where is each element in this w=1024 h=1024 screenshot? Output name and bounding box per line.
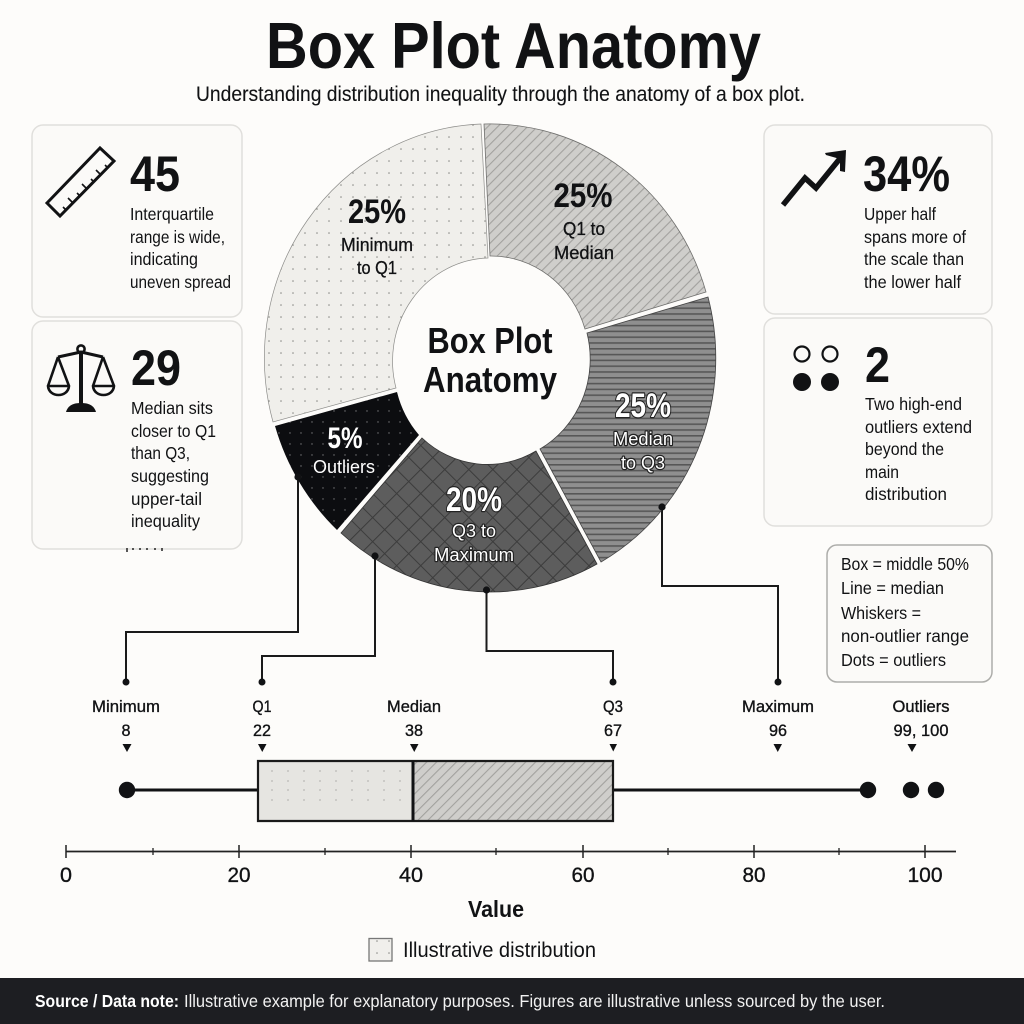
donut centre title: Anatomy [423, 359, 557, 400]
maximum dot [860, 782, 876, 798]
box plot value labels: 8 [122, 721, 130, 740]
panel: outliers card [764, 318, 992, 526]
callout: box plot key: Whiskers = [841, 603, 921, 623]
icon: four dots [793, 346, 839, 391]
text: interquartile description: Interquartile [130, 204, 214, 224]
box plot value labels: Outliers [892, 697, 950, 716]
stat: 45: 45 [130, 146, 180, 202]
label: Q1 to median: Median [554, 242, 614, 263]
text: median description: inequality [131, 511, 200, 531]
icon: rising arrow [783, 150, 846, 205]
label: minimum to Q1 [341, 193, 413, 278]
text: upper half description: Upper half [864, 204, 936, 224]
panel: upper half card [764, 125, 992, 314]
text: upper half description: the lower half [864, 272, 961, 292]
label: minimum to Q1: Minimum [341, 234, 413, 255]
median line [412, 761, 414, 821]
footer bar [0, 978, 1024, 1024]
box plot value labels: Minimum [92, 697, 160, 716]
minimum dot [119, 782, 135, 798]
callout: box plot key: non-outlier range [841, 626, 969, 646]
text: upper half description [864, 204, 966, 292]
donut centre title [423, 320, 557, 400]
connector end dots [122, 678, 782, 686]
text: outliers description: main [865, 462, 899, 482]
box plot value labels: 22 [253, 721, 271, 740]
text: outliers description [865, 394, 972, 504]
text: median description: upper-tail [131, 489, 202, 509]
text: interquartile description: indicating [130, 249, 198, 269]
box plot value labels: Q3 [603, 697, 623, 716]
text: median description: than Q3, [131, 443, 190, 463]
box plot value labels [92, 697, 950, 752]
segment: minimum to Q1 [264, 124, 488, 422]
value axis: 40 [399, 863, 423, 887]
box: Q1 to median [258, 761, 413, 821]
text: median description: Median sits [131, 398, 213, 418]
text: outliers description: Two high-end [865, 394, 962, 414]
icon: ruler [47, 148, 114, 216]
box plot value labels: Median [387, 697, 441, 716]
value axis: 20 [228, 863, 251, 887]
segment: outliers [275, 392, 419, 530]
stray marks below median card [127, 548, 162, 552]
box plot value labels: 96 [769, 721, 787, 740]
label: Q1 to median: 25% [554, 177, 612, 215]
text: median description [131, 398, 216, 531]
connector anchor dots on donut [294, 473, 666, 594]
box plot value labels: 38 [405, 721, 423, 740]
text: interquartile description [130, 204, 231, 292]
donut chart [264, 124, 716, 594]
box: median to Q3 [413, 761, 613, 821]
segment: Q1 to median [484, 124, 706, 329]
text: interquartile description: uneven spread [130, 272, 231, 292]
label: outliers: 5% [328, 422, 362, 455]
label: outliers [313, 422, 375, 477]
box dot texture [271, 770, 401, 801]
label: Q3 to maximum: Maximum [434, 544, 514, 565]
text: upper half description: the scale than [864, 249, 964, 269]
subtitle: Understanding distribution inequality through the anatomy of a box plot. [196, 83, 805, 106]
callout: box plot key: Line = median [841, 578, 944, 598]
panel: interquartile range card [32, 125, 242, 317]
label: minimum to Q1: 25% [348, 193, 406, 231]
title: Box Plot Anatomy [266, 9, 761, 82]
box plot value labels: Maximum [742, 697, 814, 716]
text: outliers description: outliers extend [865, 417, 972, 437]
value axis: 100 [908, 863, 943, 887]
segment: Q3 to maximum [341, 438, 597, 592]
callout: box plot key: Box = middle 50% [841, 554, 969, 574]
text: upper half description: spans more of [864, 227, 966, 247]
label: Q3 to maximum: Q3 to [452, 520, 496, 541]
label: median to Q3: 25% [615, 387, 671, 425]
callout: box plot key: Dots = outliers [841, 650, 946, 670]
callout: box plot key [827, 545, 992, 682]
label: Q3 to maximum [434, 481, 514, 565]
value axis: 60 [572, 863, 595, 887]
icon: balance scale [48, 345, 114, 412]
label: Q1 to median: Q1 to [563, 218, 605, 239]
outlier dots [903, 782, 944, 798]
value axis: 80 [742, 863, 766, 887]
label: median to Q3 [613, 387, 673, 473]
text: outliers description: distribution [865, 484, 947, 504]
axis title: Value [468, 896, 524, 922]
label: median to Q3: to Q3 [621, 452, 665, 473]
box plot value labels: Q1 [252, 697, 272, 716]
text: outliers description: beyond the [865, 439, 944, 459]
value axis: 0 [60, 863, 72, 887]
stat: 34%: 34% [863, 146, 950, 202]
source note: Source / Data note: [35, 991, 179, 1011]
legend: Illustrative distribution [403, 938, 596, 962]
segment: median to Q3 [540, 297, 716, 562]
source note: Illustrative example for explanatory purposes. Figures are illustrative unless sourced by the user. [184, 991, 885, 1011]
box plot value labels: 99, 100 [894, 721, 948, 740]
label: Q3 to maximum: 20% [446, 481, 502, 519]
panel: median position card [32, 321, 242, 549]
text: interquartile description: range is wide, [130, 227, 225, 247]
box outline and median line [258, 761, 613, 821]
donut centre title: Box Plot [428, 320, 552, 361]
label: Q1 to median [554, 177, 614, 263]
label: median to Q3: Median [613, 428, 673, 449]
label: outliers: Outliers [313, 456, 375, 477]
stat: 29: 29 [131, 340, 181, 396]
value axis [60, 845, 956, 887]
text: median description: closer to Q1 [131, 421, 216, 441]
label: minimum to Q1: to Q1 [357, 257, 397, 278]
box plot [119, 761, 944, 821]
stat: 2: 2 [865, 337, 890, 393]
text: median description: suggesting [131, 466, 209, 486]
whiskers [127, 788, 868, 792]
box plot value labels: 67 [604, 721, 622, 740]
connector lines from donut to box plot [126, 477, 778, 682]
